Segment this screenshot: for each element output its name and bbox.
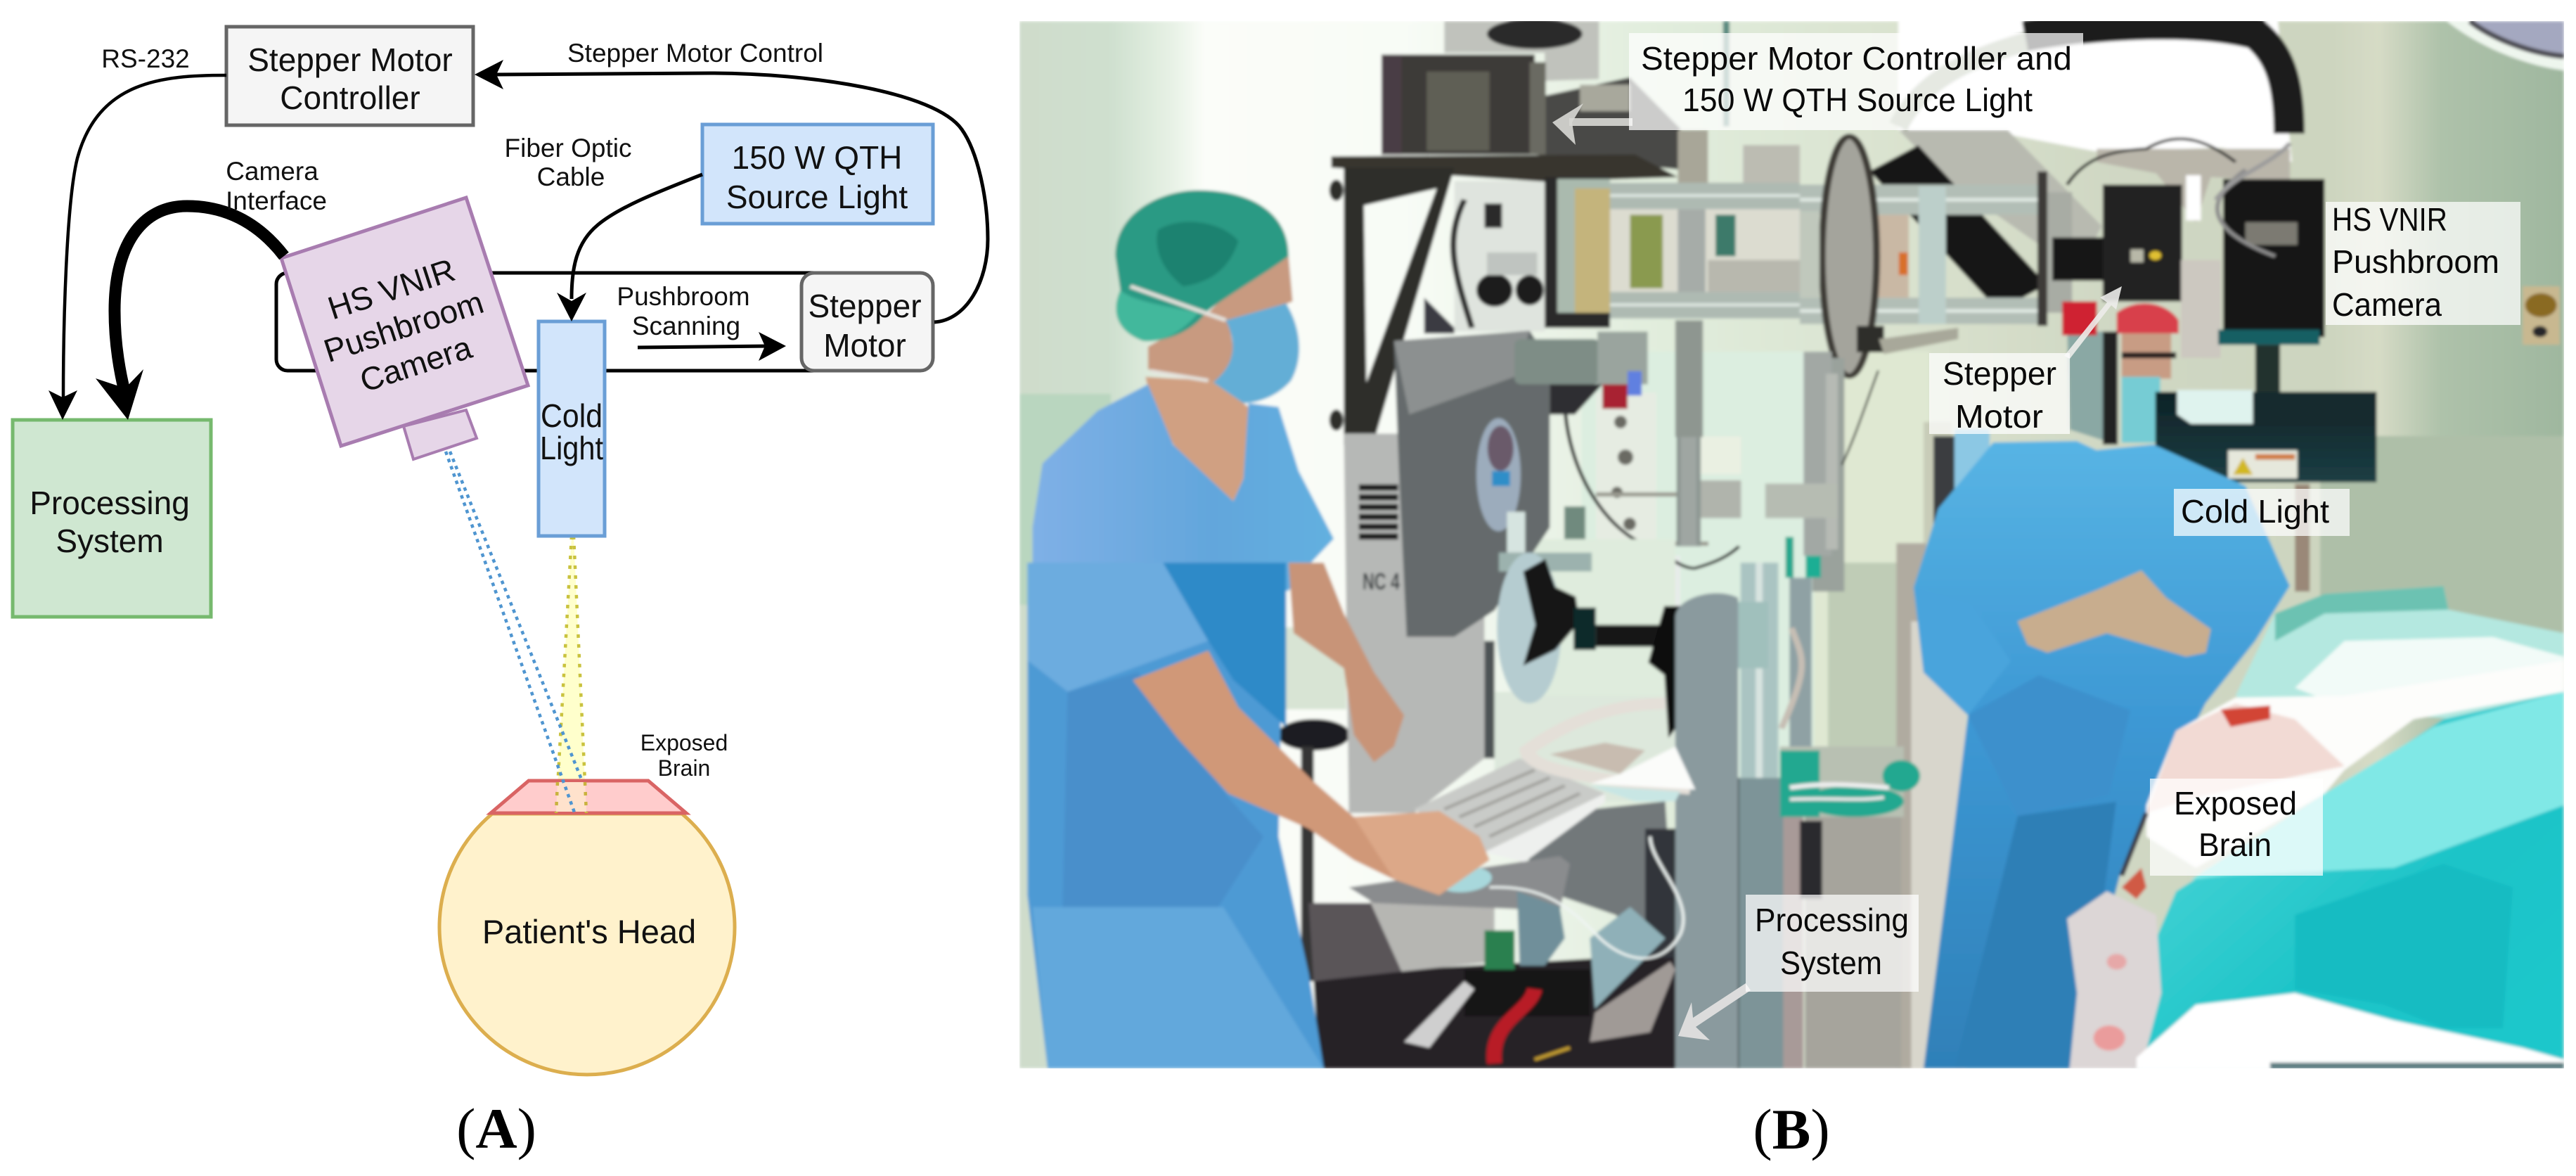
wall and background layer (1019, 21, 2564, 788)
arrow: RS-232 link to processing system (49, 75, 226, 420)
photo label: Exposed Brain (2150, 779, 2323, 876)
photo label: Processing System: Processing (1755, 902, 1909, 938)
light beam: cold light illumination (556, 536, 586, 813)
photo label: Cold Light: Cold Light (2181, 493, 2329, 530)
photo label: HS VNIR Pushbroom Camera: HS VNIR (2332, 201, 2447, 238)
label: Fiber Optic Cable: Fiber Optic (505, 134, 631, 162)
shape: patient's head (439, 814, 735, 1075)
box: 150 W QTH Source Light: Source Light (726, 179, 908, 215)
photo label: HS VNIR Pushbroom Camera: Camera (2332, 286, 2442, 323)
box: Cold Light: Cold (541, 397, 603, 434)
photo label: Stepper Motor Controller and 150 W QTH Source Light (1629, 33, 2083, 130)
box: Processing System (13, 420, 211, 617)
photo label: HS VNIR Pushbroom Camera: Pushbroom (2332, 243, 2499, 280)
label: Exposed Brain: Brain (658, 755, 710, 781)
photo label: Stepper Motor: Stepper (1943, 355, 2056, 392)
arrow: camera interface thick link (96, 206, 284, 420)
photo label: Processing System: System (1780, 945, 1882, 981)
box: 150 W QTH Source Light (702, 124, 933, 224)
label: Camera Interface: Interface (226, 186, 327, 215)
box: 150 W QTH Source Light: 150 W QTH (732, 139, 902, 176)
person on the left with cap and mask (1033, 191, 1334, 591)
monitor arm disc (1497, 512, 1680, 738)
upper microscope and controller: zoomed coordinates (1329, 19, 1801, 445)
photo label: Exposed Brain: Brain (2198, 826, 2272, 863)
person on the right in a surgical gown (1914, 441, 2290, 1068)
patient with surgical drapes (2067, 586, 2564, 1069)
arrow: stepper motor control (475, 60, 988, 322)
label: Pushbroom Scanning: Pushbroom (617, 282, 750, 311)
box: Stepper Motor Controller: Stepper Motor (247, 41, 453, 78)
photo label: Exposed Brain: Exposed (2174, 785, 2297, 822)
upper right equipment: scanner, camera, cold light (1800, 130, 2560, 592)
box: Cold Light (539, 321, 605, 536)
box: Cold Light: Light (540, 430, 603, 466)
photo label: Stepper Motor: Motor (1955, 398, 2043, 435)
photo scene illustration (1019, 19, 2564, 1069)
box: Processing System: Processing (30, 485, 190, 521)
overhead cable arcs (1898, 24, 2289, 134)
caption: (B): (B) (1753, 1097, 1830, 1161)
photo label: HS VNIR Pushbroom Camera (2326, 201, 2520, 325)
label: Exposed Brain (640, 730, 728, 781)
label: Camera Interface (226, 157, 327, 215)
label: Pushbroom Scanning: Scanning (632, 312, 740, 340)
label: Patient's Head: Patient's Head (482, 913, 696, 950)
photo label: Processing System (1746, 895, 1919, 992)
label: Camera Interface: Camera (226, 157, 318, 186)
box: Stepper Motor: Stepper (808, 288, 922, 324)
label: Fiber Optic Cable (505, 134, 631, 191)
label arrow: to stepper motor (2064, 286, 2122, 359)
center stand, monitor and rails (1566, 352, 1879, 747)
lamp at top right (2447, 21, 2564, 70)
box: HS VNIR Pushbroom Camera: HS VNIR (323, 251, 459, 326)
caption: (A): (A) (456, 1097, 536, 1161)
box: Stepper Motor: Motor (823, 327, 906, 364)
label: Stepper Motor Control: Stepper Motor Control (567, 39, 823, 68)
box: Processing System: System (56, 523, 164, 559)
text on the equipment: NC 4: NC 4 (1363, 568, 1400, 594)
panel A: system schematic diagram (13, 27, 988, 1075)
keyboard area background and stand with monitor (1277, 433, 1675, 981)
label: Pushbroom Scanning (617, 282, 750, 340)
label arrow: to stepper motor controller (1552, 103, 1632, 145)
label arrow: to processing system (1678, 983, 1751, 1040)
box: HS VNIR Pushbroom Camera (281, 198, 528, 459)
box: Stepper Motor (801, 273, 933, 371)
photo label: Stepper Motor Controller and 150 W QTH Source Light: 150 W QTH Source Light (1682, 82, 2033, 118)
box: Stepper Motor Controller (226, 27, 473, 125)
monitor (1394, 320, 1703, 637)
panel B: operating room photograph (1019, 19, 2564, 1069)
box: Stepper Motor Controller: Controller (280, 79, 420, 116)
label: RS-232: RS-232 (101, 44, 190, 73)
arrow: pushbroom scanning direction (638, 332, 786, 361)
box: HS VNIR Pushbroom Camera: Camera (355, 328, 477, 399)
teal bottles, canister and wall pillar (1780, 543, 1966, 1068)
shape: exposed brain trapezoid (491, 781, 686, 813)
label: Exposed Brain: Exposed (640, 730, 728, 755)
processing cart and tower (1308, 563, 1803, 1068)
photo label: Stepper Motor Controller and 150 W QTH Source Light: Stepper Motor Controller and (1641, 40, 2072, 77)
scan track rail (276, 273, 839, 371)
label: Fiber Optic Cable: Cable (537, 162, 605, 191)
camera field of view dotted lines (446, 452, 581, 812)
arrow: fiber optic cable (557, 174, 702, 321)
box: HS VNIR Pushbroom Camera: Pushbroom (319, 283, 488, 369)
beam overlap on the brain (556, 782, 586, 813)
photo label: Stepper Motor (1929, 353, 2070, 435)
photo label: Cold Light (2174, 489, 2350, 536)
